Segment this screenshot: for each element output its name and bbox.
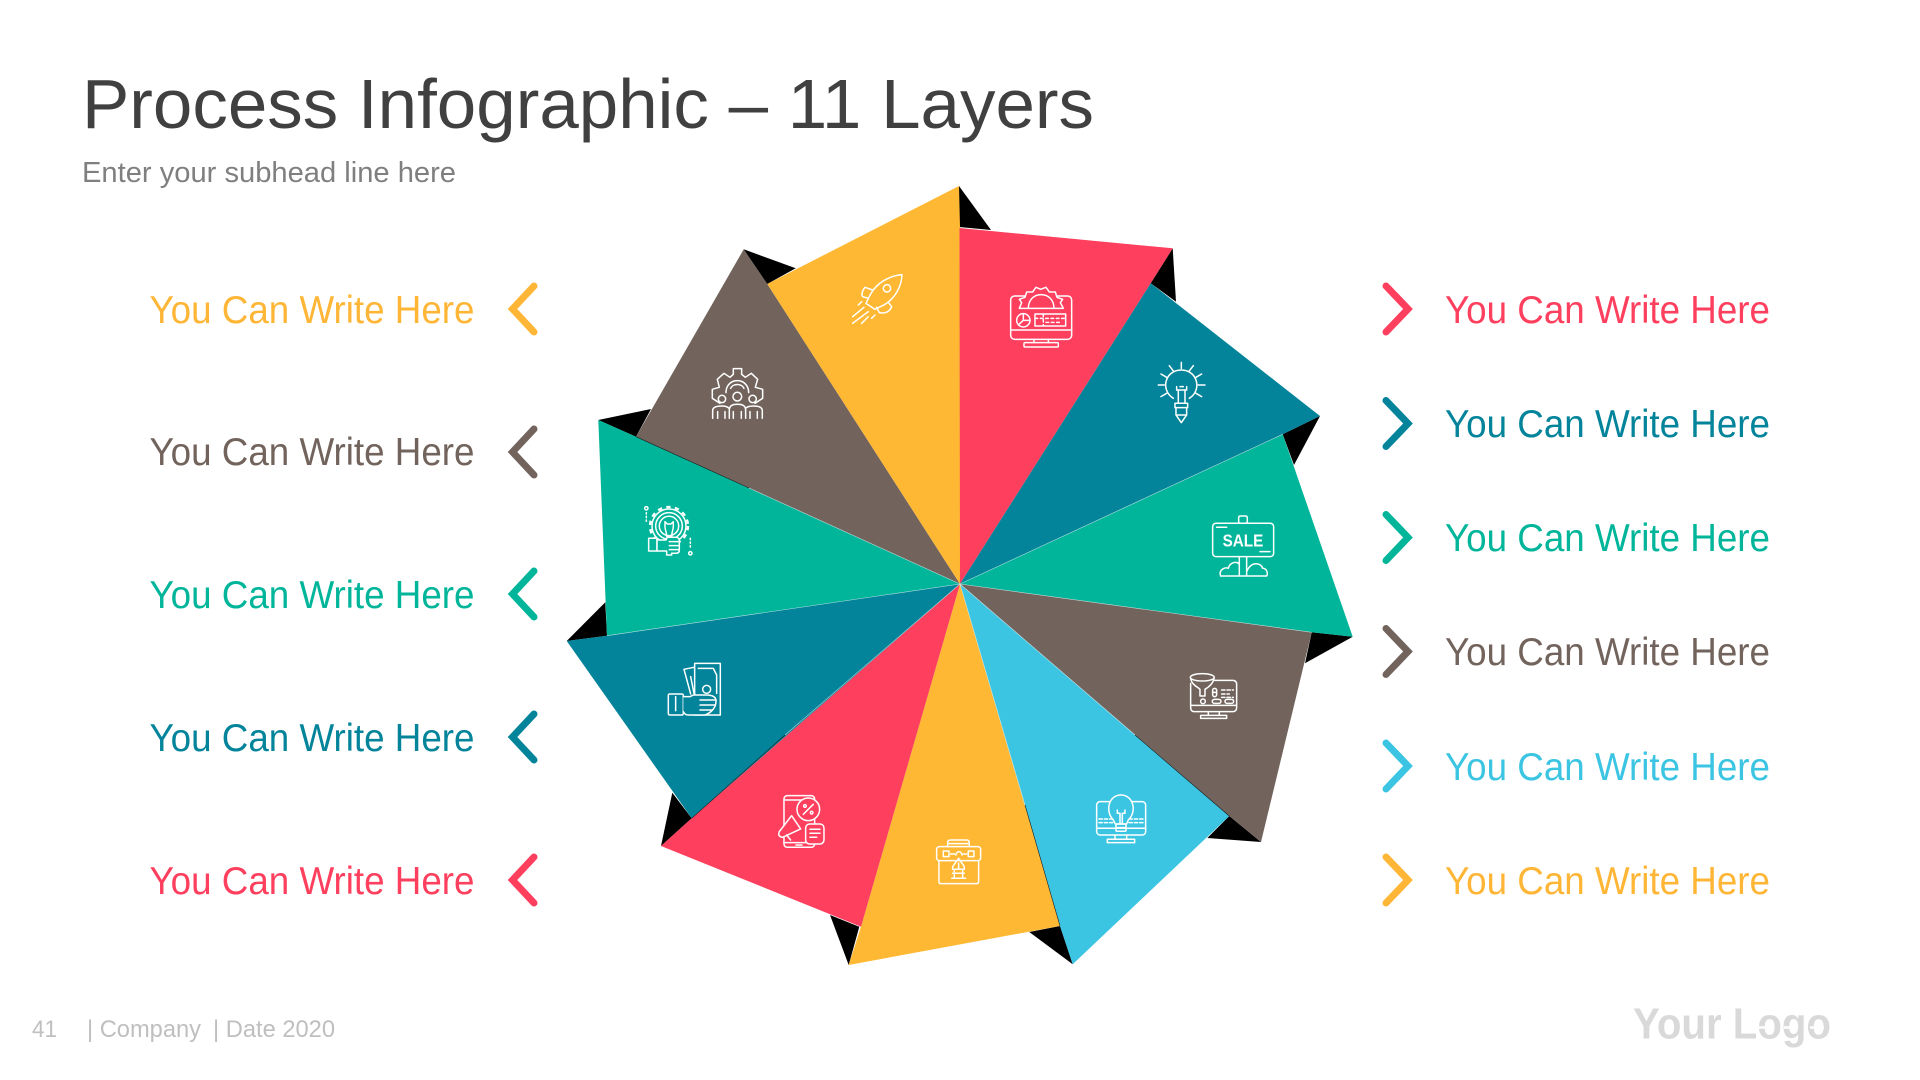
icon: sale sign (1213, 516, 1274, 576)
footer: page number and company (32, 1016, 335, 1043)
subhead: Enter your subhead line here (82, 157, 456, 189)
icon: phone marketing (779, 796, 824, 847)
title: Process Infographic – 11 Layers (82, 65, 1094, 143)
slice: brown lower right (960, 584, 1312, 842)
seam lines (607, 434, 1312, 926)
right label 4: You Can Write Here (1445, 631, 1770, 674)
footer: page number and company: | Company (87, 1016, 201, 1043)
left label 4: You Can Write Here (150, 717, 474, 760)
logo: Your Logo (1633, 1000, 1831, 1048)
icon: sale sign: SALE (1223, 531, 1263, 551)
icon: wrench gear hand (645, 507, 692, 555)
left label 3: You Can Write Here (150, 574, 474, 617)
footer: page number and company: 41 (32, 1016, 57, 1043)
right label 5: You Can Write Here (1445, 746, 1770, 789)
icon: toolbox with pen (937, 840, 981, 884)
icon: light bulb pencil (1158, 362, 1205, 423)
icon: dashboard monitor with gear (1011, 287, 1072, 347)
left label 5: You Can Write Here (150, 860, 474, 903)
slice: brown upper left (598, 249, 960, 584)
footer: page number and company: | Date 2020 (213, 1016, 335, 1043)
right label 3: You Can Write Here (1445, 517, 1770, 560)
right label 1: You Can Write Here (1445, 289, 1770, 332)
slice: red top (960, 228, 1176, 584)
slice: yellow top (744, 186, 991, 584)
slice: green left (598, 420, 960, 636)
radial fan chart (567, 186, 1353, 965)
slice: teal left (567, 584, 960, 818)
icon: gear and people (712, 369, 763, 418)
left label 1: You Can Write Here (150, 289, 474, 332)
slice: teal upper right (960, 283, 1320, 584)
slice: red bottom left (661, 584, 960, 927)
slice: yellow bottom (830, 584, 1060, 965)
slice: green right (960, 434, 1353, 663)
slice: blue bottom right (960, 584, 1229, 964)
right label 2: You Can Write Here (1445, 403, 1770, 446)
icon: bulb monitor (1097, 795, 1146, 843)
left label 2: You Can Write Here (150, 431, 474, 474)
right label 6: You Can Write Here (1445, 860, 1770, 903)
icon: rocket (853, 275, 902, 323)
icon: funnel monitor (1190, 674, 1237, 718)
icon: hand holding money (668, 663, 720, 715)
